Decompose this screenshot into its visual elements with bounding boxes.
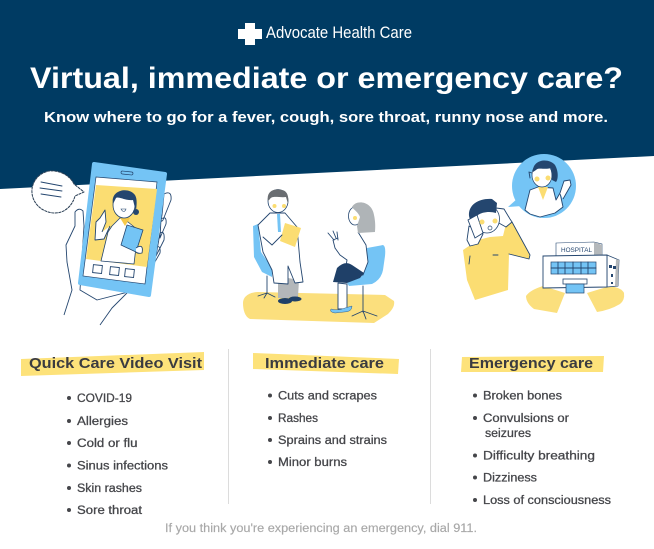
phone buttons bbox=[93, 265, 134, 278]
heading highlight bbox=[253, 353, 399, 374]
bullet list: Sinus infections bbox=[77, 460, 168, 472]
bullet list: Cold or flu bbox=[77, 438, 138, 450]
bullet list: Cuts and scrapes bbox=[278, 390, 377, 402]
floor shape bbox=[243, 292, 394, 323]
logo: Advocate Health Care bbox=[238, 23, 412, 45]
subtitle: Know where to go for a fever, cough, sore throat, runny nose and more. bbox=[44, 109, 608, 126]
bullet list: Minor burns bbox=[278, 457, 347, 469]
icon: speech bubble bbox=[32, 171, 84, 213]
phone screen background bbox=[86, 185, 157, 267]
illustration: doctor and patient bbox=[243, 189, 394, 323]
panel: immediate care bbox=[253, 353, 399, 469]
title: Virtual, immediate or emergency care? bbox=[30, 62, 623, 95]
phone body bbox=[80, 164, 165, 295]
bullet list: Difficulty breathing bbox=[483, 450, 595, 462]
doctor chair bbox=[253, 224, 275, 298]
bullet list: Dizziness bbox=[483, 472, 537, 484]
man on phone bbox=[463, 199, 530, 300]
phone screen bbox=[83, 177, 157, 284]
illustration: phone video visit bbox=[32, 164, 171, 325]
bullet list: Skin rashes bbox=[77, 483, 142, 495]
heading: Emergency care bbox=[469, 355, 593, 372]
bullet list: Convulsions or bbox=[483, 413, 569, 425]
patient bbox=[328, 202, 375, 313]
bullet list bbox=[67, 393, 168, 517]
doctor bbox=[258, 189, 303, 304]
patient chair bbox=[347, 245, 385, 319]
icon: logo cross bbox=[238, 23, 262, 45]
speech bubble with doctor bbox=[508, 154, 576, 218]
hospital sign: HOSPITAL bbox=[561, 247, 592, 254]
illustration: emergency call and hospital bbox=[463, 154, 624, 313]
footer note: If you think you're experiencing an emergency, dial 911. bbox=[165, 523, 477, 535]
heading: Immediate care bbox=[265, 355, 384, 372]
panel: quick care video visit bbox=[21, 352, 204, 517]
heading: Quick Care Video Visit bbox=[29, 355, 202, 372]
doctor on screen bbox=[95, 190, 143, 264]
bullet list: Loss of consciousness bbox=[483, 495, 611, 507]
bullet list: Broken bones bbox=[483, 390, 562, 402]
panel: emergency care bbox=[461, 355, 611, 507]
ground shape right bbox=[587, 286, 624, 312]
bullet list: Allergies bbox=[77, 416, 128, 428]
bullet list bbox=[268, 390, 387, 469]
heading highlight bbox=[21, 352, 204, 376]
heading highlight bbox=[461, 356, 604, 372]
bullet list: COVID-19 bbox=[77, 393, 132, 405]
bullet list: Rashes bbox=[278, 413, 318, 425]
header band bbox=[0, 0, 654, 189]
hospital building bbox=[543, 242, 619, 293]
bullet list bbox=[473, 390, 611, 507]
bullet list: Sore throat bbox=[77, 505, 143, 517]
bullet list: seizures bbox=[485, 428, 531, 440]
ground shape left bbox=[526, 286, 565, 313]
logo wordmark: Advocate Health Care bbox=[266, 24, 412, 42]
phone speaker bbox=[121, 171, 133, 175]
bullet list: Sprains and strains bbox=[278, 435, 387, 447]
icon: hand holding phone bbox=[64, 209, 128, 325]
